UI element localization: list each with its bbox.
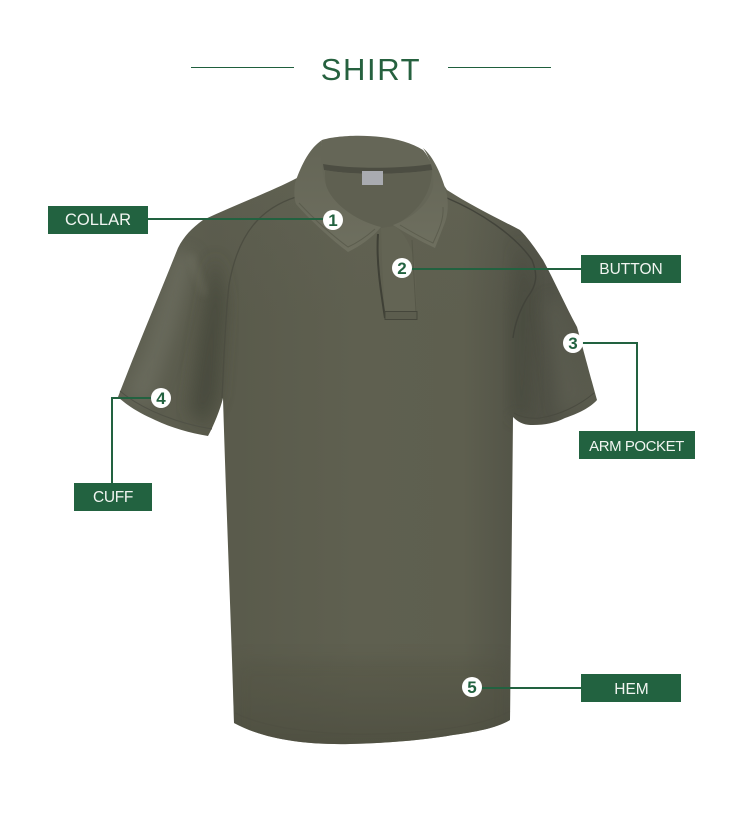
raglan seams <box>222 197 296 398</box>
label: collar <box>48 206 148 234</box>
shirt silhouette <box>118 164 597 744</box>
title: SHIRT <box>321 52 421 87</box>
callout 1: collar <box>48 206 343 234</box>
label: button: BUTTON <box>599 261 663 278</box>
bottom hem <box>235 711 510 734</box>
marker 2 <box>392 258 412 278</box>
marker 5: 5 <box>467 678 477 697</box>
marker 1 <box>323 210 343 230</box>
callout 4: cuff <box>74 388 171 511</box>
neck label <box>362 171 383 185</box>
label: collar: COLLAR <box>65 211 131 229</box>
callout 2: button <box>392 255 681 283</box>
left collar flap <box>294 140 381 252</box>
label: hem: HEM <box>614 681 649 698</box>
label: cuff: CUFF <box>93 489 133 506</box>
label: hem <box>581 674 681 702</box>
placket <box>381 226 417 320</box>
callout 3: arm pocket <box>563 333 695 459</box>
label: button <box>581 255 681 283</box>
back collar interior <box>320 136 435 228</box>
callout 5: hem <box>462 674 681 702</box>
label: arm pocket: ARM POCKET <box>589 438 684 455</box>
marker 2: 2 <box>397 259 407 278</box>
right collar flap <box>393 148 448 248</box>
marker 4: 4 <box>156 389 166 408</box>
cuff hems <box>120 391 212 429</box>
shading <box>135 184 528 744</box>
marker 1: 1 <box>328 211 338 230</box>
marker 5 <box>462 677 482 697</box>
marker 3: 3 <box>568 334 578 353</box>
shirt illustration <box>100 130 610 750</box>
